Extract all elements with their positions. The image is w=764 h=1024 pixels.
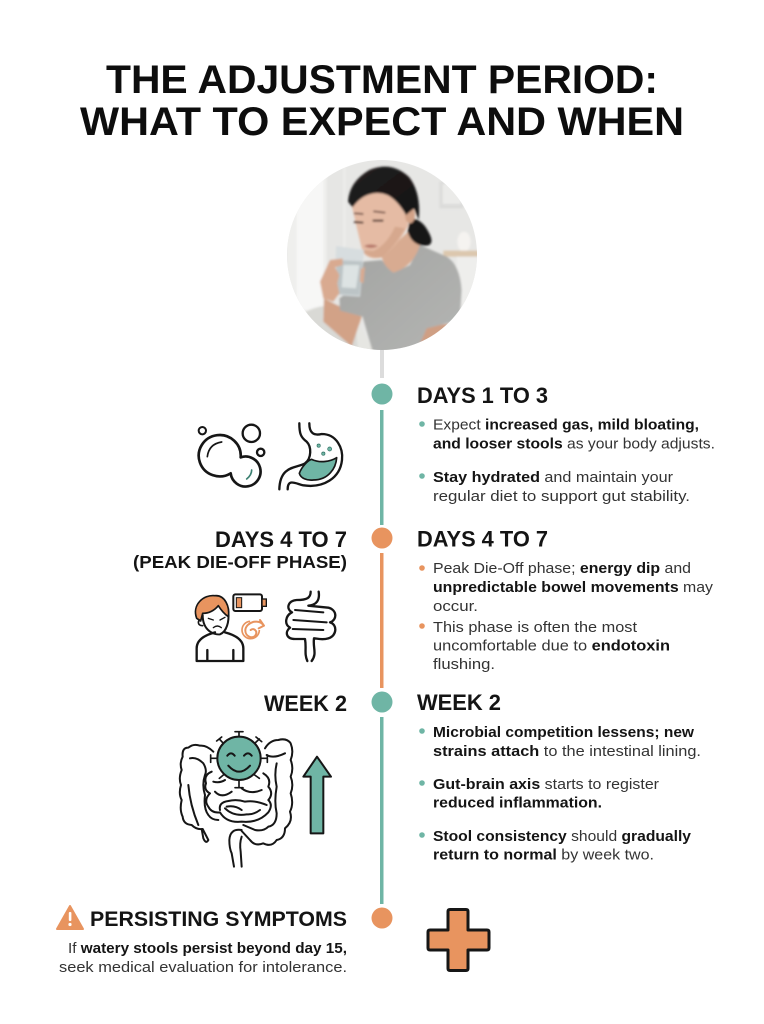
panel: days 4 to 7 text: [417, 526, 714, 673]
ascending colon: [180, 745, 218, 842]
hand: [320, 258, 343, 302]
heading: days 4 to 7 peak die-off phase: (PEAK DIE-OFF PHASE): [133, 552, 347, 572]
heading: persisting symptoms: PERSISTING SYMPTOMS: [90, 907, 347, 931]
icon: medical cross: [428, 910, 489, 970]
descending colon: [242, 739, 292, 845]
timeline dot: days 4 to 7: [372, 528, 392, 548]
hair: [348, 167, 419, 220]
panel: days 4 to 7 text: Peak Die-Off phase; energy dip and: [433, 560, 691, 577]
panel: days 1 to 3 text: Expect increased gas, mild bloating,: [433, 416, 699, 434]
panel: week 2 text: reduced inflammation.: [433, 794, 602, 812]
title: [80, 58, 684, 144]
small intestine: [205, 772, 271, 822]
rectum: [229, 830, 242, 867]
title: THE ADJUSTMENT PERIOD:: [106, 58, 658, 102]
icon: stomach: [279, 423, 342, 489]
ear: [405, 207, 415, 223]
title: WHAT TO EXPECT AND WHEN: [80, 100, 684, 144]
right forearm: [419, 322, 448, 342]
heading: week 2 left: WEEK 2: [264, 691, 347, 716]
panel: week 2 text: [417, 690, 701, 864]
icon: tired person with low battery: [195, 594, 266, 661]
neck: [382, 228, 420, 273]
panel: days 1 to 3 text: [417, 383, 715, 505]
panel: week 2 text: Microbial competition lessens; new: [433, 724, 694, 741]
icon: warning triangle: [57, 906, 83, 929]
icon: intestines: [286, 592, 335, 661]
glass: [335, 246, 364, 297]
shirt: [339, 245, 462, 354]
panel: days 1 to 3 text: and looser stools as your body adjusts.: [433, 436, 715, 452]
heading: week 2: WEEK 2: [417, 690, 501, 715]
icon: up arrow: [303, 757, 331, 833]
text: persisting symptoms advice: seek medical evaluation for intolerance.: [59, 959, 347, 976]
heading: days 4 to 7 peak die-off phase: DAYS 4 TO 7: [215, 527, 347, 552]
icon: happy microbe in large intestine: [180, 732, 292, 867]
text: persisting symptoms advice: If watery stools persist beyond day 15,: [68, 940, 347, 957]
timeline dot: persisting symptoms: [372, 908, 392, 928]
mouth: [364, 244, 378, 248]
heading: days 4 to 7 peak die-off phase: [133, 527, 347, 572]
panel: week 2 text: strains attach to the intestinal lining.: [433, 743, 701, 760]
heading: days 1 to 3: DAYS 1 TO 3: [417, 383, 548, 408]
panel: days 4 to 7 text: uncomfortable due to endotoxin: [433, 638, 670, 654]
icon: gas bubbles: [199, 425, 264, 487]
panel: days 1 to 3 text: Stay hydrated and maintain your: [433, 469, 673, 486]
timeline dot: week 2: [372, 692, 392, 712]
face: [352, 192, 408, 258]
panel: days 1 to 3 text: regular diet to support gut stability.: [433, 488, 690, 505]
eyes and brows: [354, 211, 385, 214]
panel: week 2 text: return to normal by week two.: [433, 846, 654, 864]
panel: days 4 to 7 text: This phase is often the most: [433, 619, 638, 636]
timeline line: [380, 350, 384, 904]
ponytail: [408, 218, 432, 246]
panel: days 4 to 7 text: occur.: [433, 598, 478, 615]
text: persisting symptoms advice: [59, 940, 347, 976]
panel: days 4 to 7 text: flushing.: [433, 656, 495, 673]
panel: week 2 text: Stool consistency should gradually: [433, 828, 692, 845]
panel: week 2 text: Gut-brain axis starts to register: [433, 776, 659, 793]
photo: woman drinking water: [287, 160, 480, 357]
panel: days 4 to 7 text: unpredictable bowel movements may: [433, 579, 714, 596]
timeline dot: days 1 to 3: [372, 384, 392, 404]
heading: days 4 to 7: DAYS 4 TO 7: [417, 526, 548, 552]
left forearm: [323, 298, 362, 347]
